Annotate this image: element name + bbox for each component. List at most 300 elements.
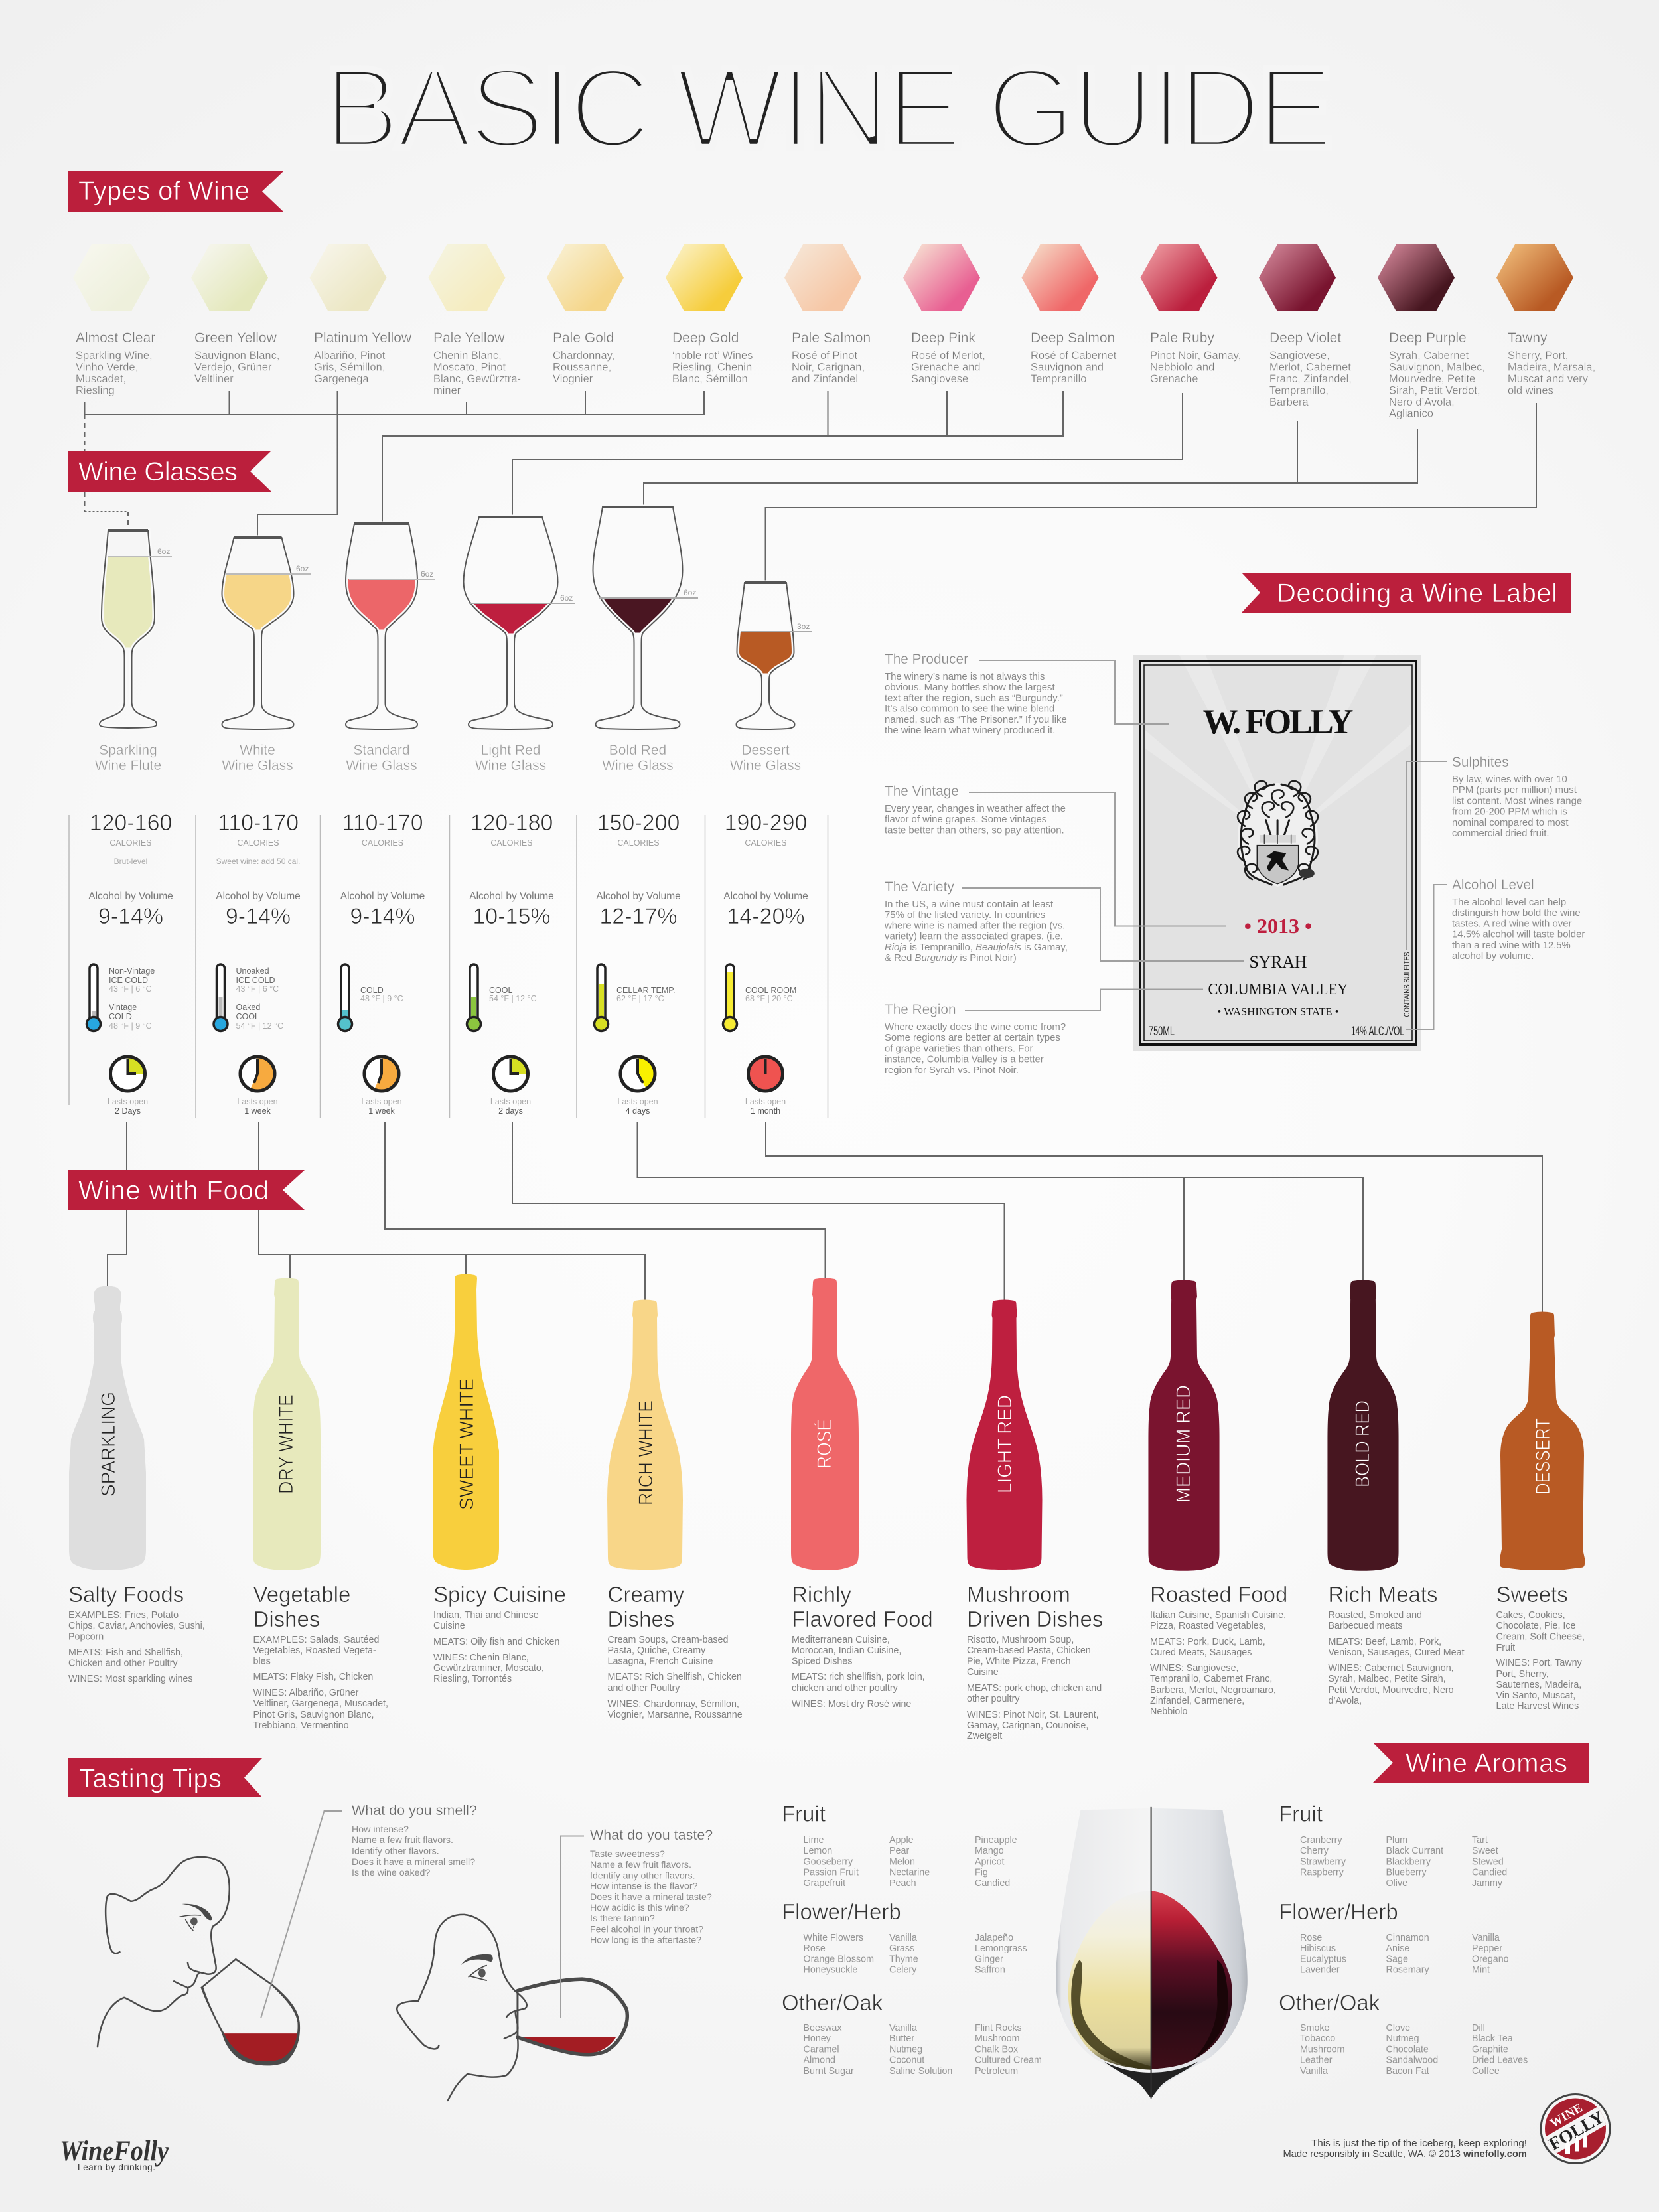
text: tawny: Tawny	[1508, 331, 1548, 346]
text: pale yellow: miner	[433, 385, 461, 397]
glass base	[1104, 2062, 1198, 2099]
text: almost clear: Riesling	[76, 385, 115, 397]
aromas: other and oak: Mushroom	[1300, 2044, 1345, 2055]
food: rich meats: Petit Verdot, Mourvedre, Nero	[1329, 1685, 1454, 1696]
logo: Wine Folly wordmark: Learn by drinking.	[78, 2162, 155, 2172]
hexagon: pale gold	[547, 244, 624, 311]
aromas: fruit: Fruit	[1279, 1801, 1323, 1826]
stats: sparkling	[86, 810, 173, 1116]
bottle: rosé: ROSÉ	[814, 1419, 835, 1469]
text: deep gold: Riesling, Chenin	[672, 361, 752, 373]
text: deep violet: Franc, Zinfandel,	[1269, 373, 1352, 385]
text: deep salmon: Deep Salmon	[1031, 331, 1115, 346]
aromas: other and oak: Leather	[1300, 2055, 1333, 2066]
food: richly flavored food: Richly	[792, 1582, 851, 1607]
text: what do you smell: Name a few fruit flavors.	[352, 1835, 453, 1846]
hexagon: tawny	[1496, 244, 1573, 311]
glass: white wine	[222, 538, 311, 773]
text: what do you taste: How intense is the flavor?	[590, 1881, 698, 1892]
label text: producer: W. FOLLY	[1202, 703, 1354, 741]
stats: light red: Lasts open	[490, 1097, 531, 1106]
callout: sulphites: commercial dried fruit.	[1452, 828, 1549, 839]
text: almost clear: Muscadet,	[76, 373, 126, 385]
aromas: fruit: Cranberry	[1300, 1835, 1342, 1846]
stats: sparkling: 43 °F | 6 °C	[109, 984, 152, 994]
stats: light red: Alcohol by Volume	[469, 891, 554, 902]
stats: dessert: 14-20%	[727, 904, 805, 929]
text: pale ruby: Pale Ruby	[1150, 331, 1214, 346]
text: what do you smell: Is the wine oaked?	[352, 1868, 430, 1878]
stats: white: CALORIES	[237, 838, 279, 848]
food: creamy dishes: Lasagna, French Cuisine	[608, 1657, 713, 1667]
callout: the producer: The winery’s name is not always this	[885, 672, 1045, 682]
connector lines: glasses to bottles	[108, 1122, 1542, 1313]
callout: alcohol level: tastes. A red wine with over	[1452, 919, 1571, 929]
aromas: fruit: Lemon	[803, 1846, 832, 1856]
glass: white wine: 6oz	[296, 564, 309, 573]
callout: sulphites	[1452, 755, 1582, 839]
food: creamy dishes: and other Poultry	[608, 1683, 680, 1694]
stats: bold red: Alcohol by Volume	[596, 891, 681, 902]
aromas: other and oak: Dill	[1472, 2023, 1485, 2033]
aromas: other and oak: Saline Solution	[889, 2066, 952, 2077]
white wine dark edge	[1071, 1960, 1151, 2070]
face lower profile	[98, 1972, 200, 2047]
logo: Wine Folly badge	[1540, 2093, 1611, 2164]
bottle: rich white	[607, 1299, 683, 1570]
aromas: other and oak: Burnt Sugar	[803, 2066, 854, 2077]
aromas: flower and herb: Sage	[1386, 1954, 1408, 1964]
text: what do you smell: What do you smell?	[352, 1803, 477, 1818]
stats: white	[214, 810, 301, 1116]
food: sweets: Fruit	[1496, 1643, 1515, 1653]
callout: sulphites: By law, wines with over 10	[1452, 774, 1567, 785]
callout: sulphites: list content. Most wines range	[1452, 796, 1582, 806]
section banner: Types of Wine	[68, 171, 283, 212]
hexagon: deep salmon	[1022, 244, 1099, 311]
label text: region: COLUMBIA VALLEY	[1208, 981, 1348, 998]
food: roasted food: Zinfandel, Carmenere,	[1150, 1696, 1244, 1706]
text: deep salmon: Tempranillo	[1031, 373, 1086, 385]
aromas: fruit	[782, 1801, 1017, 1889]
text: platinum yellow: Gargenega	[314, 373, 369, 385]
food: rich meats	[1329, 1582, 1465, 1706]
bottle: rosé	[791, 1278, 859, 1570]
callout: alcohol level: The alcohol level can help	[1452, 897, 1566, 908]
stats: sparkling: 9-14%	[98, 904, 163, 929]
callout: the variety: where wine is named after the region (vs.	[884, 921, 1065, 931]
illustration: half white half red wine glass	[1056, 1807, 1248, 2099]
text: platinum yellow	[314, 331, 412, 385]
stats: standard: Lasts open	[361, 1097, 402, 1106]
logo: Wine Folly wordmark: WineFolly	[60, 2136, 169, 2167]
food: sweets: Port, Sherry,	[1496, 1669, 1549, 1680]
hexagon: platinum yellow	[309, 244, 386, 311]
food: mushroom driven dishes: Cream-based Pasta, Chicken	[967, 1645, 1091, 1656]
stats: light red: COOL	[489, 986, 512, 995]
hexagon: deep violet	[1259, 244, 1336, 311]
callout: the producer: obvious. Many bottles show the largest	[885, 682, 1055, 693]
food: sweets: Late Harvest Wines	[1496, 1701, 1579, 1712]
food: rich meats: Barbecued meats	[1329, 1621, 1403, 1631]
callout: the variety: The Variety	[885, 879, 954, 895]
eyebrow	[461, 1954, 493, 1965]
stats: bold red: CALORIES	[617, 838, 660, 848]
stats: standard: 110-170	[342, 810, 423, 836]
bottle: dessert	[1500, 1311, 1585, 1570]
food: mushroom driven dishes	[967, 1582, 1103, 1741]
aromas: fruit: Tart	[1472, 1835, 1488, 1846]
stats: sparkling: Lasts open	[108, 1097, 148, 1106]
glass: bold red: Wine Glass	[602, 758, 674, 773]
food: mushroom driven dishes: other poultry	[967, 1694, 1020, 1704]
stats: bold red: CELLAR TEMP.	[616, 986, 675, 995]
stats: standard: COLD	[360, 986, 384, 995]
aromas: flower and herb: Anise	[1386, 1943, 1409, 1954]
aromas: other and oak: Vanilla	[889, 2023, 917, 2033]
callout: the variety: & Red Burgundy is Pinot Noir)	[885, 953, 1017, 964]
aromas: fruit: Lime	[803, 1835, 824, 1846]
callout: alcohol level: distinguish how bold the wine	[1452, 908, 1581, 919]
text: pale yellow: Pale Yellow	[433, 331, 505, 346]
callout: the producer: It’s also common to see the wine blend	[885, 704, 1054, 715]
food: rich meats: Roasted, Smoked and	[1329, 1610, 1422, 1621]
stats: dessert: COOL ROOM	[745, 986, 796, 995]
text: tawny: old wines	[1508, 385, 1553, 397]
aromas: flower and herb: Eucalyptus	[1300, 1954, 1346, 1964]
label text: sulfites: CONTAINS SULFITES	[1404, 952, 1411, 1017]
text: almost clear: Sparkling Wine,	[76, 350, 153, 362]
glass: sparkling flute	[95, 530, 172, 773]
text: what do you taste: Feel alcohol in your throat?	[590, 1924, 703, 1935]
text: what do you smell	[261, 1803, 477, 2018]
stats: white: ICE COLD	[236, 976, 275, 985]
aromas: fruit: Peach	[889, 1878, 916, 1889]
callout: alcohol level: than a red wine with 12.5%	[1452, 940, 1571, 951]
glass outline	[200, 1958, 300, 2065]
glass: light red	[463, 517, 575, 773]
panel: wine colour hexagons	[73, 244, 1573, 311]
label text: volume: 750ML	[1149, 1025, 1175, 1039]
food: salty foods: WINES: Most sparkling wines	[68, 1674, 193, 1684]
red wine dark edge	[1192, 1960, 1228, 2061]
text: deep gold: Deep Gold	[672, 331, 739, 346]
glass: bold red: Bold Red	[609, 743, 666, 758]
food: salty foods: Salty Foods	[68, 1582, 184, 1607]
panel: wine statistics columns	[69, 810, 828, 1118]
illustration: tasting wine	[397, 1915, 627, 2101]
glass: sparkling flute: 6oz	[157, 547, 170, 556]
icon: heraldic crest	[1238, 781, 1318, 887]
head profile	[397, 1915, 527, 2049]
food: spicy cuisine: Cuisine	[433, 1621, 465, 1631]
aromas: flower and herb: Thyme	[889, 1954, 918, 1964]
text: almost clear	[76, 331, 155, 397]
stats: sparkling: ICE COLD	[109, 976, 148, 985]
wine in glass	[222, 2033, 298, 2063]
aromas: flower and herb: Jalapeño	[975, 1933, 1013, 1943]
aromas: other and oak: Chalk Box	[975, 2044, 1018, 2055]
food: spicy cuisine: MEATS: Oily fish and Chicken	[433, 1637, 559, 1647]
aromas: flower and herb: Mint	[1472, 1965, 1490, 1976]
panel: wine colour descriptions	[76, 331, 1595, 419]
food: richly flavored food: chicken and other poultry	[792, 1683, 899, 1694]
callout: the variety	[884, 879, 1068, 964]
aromas: flower and herb: Celery	[889, 1965, 917, 1976]
stats: sparkling: COLD	[109, 1012, 132, 1021]
food: spicy cuisine: Riesling, Torrontés	[433, 1674, 512, 1684]
hexagon: deep gold	[666, 244, 743, 311]
glass: standard	[346, 524, 435, 773]
stats: sparkling: Non-Vintage	[109, 966, 155, 976]
text: green yellow: Verdejo, Grüner	[194, 361, 272, 373]
aromas: other and oak: Coffee	[1472, 2066, 1500, 2077]
aromas: fruit: Strawberry	[1300, 1856, 1346, 1867]
text: deep pink: Grenache and	[911, 361, 981, 373]
text: tawny: Muscat and very	[1508, 373, 1589, 385]
hexagon: pale salmon	[784, 244, 861, 311]
stats: bold red	[595, 810, 681, 1116]
aromas: flower and herb: Rose	[1300, 1933, 1322, 1943]
text: what do you smell: Identify other flavors.	[352, 1846, 439, 1857]
section banner: Types of Wine: Types of Wine	[78, 177, 250, 206]
stats: standard: 1 week	[368, 1106, 396, 1116]
stats: white: COOL	[236, 1012, 259, 1021]
glass: bold red	[593, 507, 698, 773]
glass: standard: Wine Glass	[346, 758, 417, 773]
aromas: other and oak: Mushroom	[975, 2033, 1020, 2044]
footer note: This is just the tip of the iceberg, keep exploring!	[1311, 2138, 1527, 2149]
food: richly flavored food: Flavored Food	[792, 1607, 933, 1631]
aromas: flower and herb: Flower/Herb	[1279, 1899, 1398, 1924]
callout: the region: The Region	[885, 1002, 956, 1017]
food: roasted food: Nebbiolo	[1150, 1706, 1187, 1717]
food: sweets: WINES: Port, Tawny	[1496, 1658, 1583, 1668]
callout: the vintage: taste better than others, so pay attention.	[885, 825, 1064, 836]
food: roasted food: Pizza, Roasted Vegetables,	[1150, 1621, 1266, 1631]
text: pale ruby: Pinot Noir, Gamay,	[1150, 350, 1241, 362]
food: sweets	[1496, 1582, 1585, 1712]
food: richly flavored food: Spiced Dishes	[792, 1657, 852, 1667]
text: almost clear: Vinho Verde,	[76, 361, 138, 373]
text: deep violet: Merlot, Cabernet	[1269, 361, 1351, 373]
food: mushroom driven dishes: WINES: Pinot Noir, St. Laurent,	[967, 1710, 1099, 1720]
bottle: rich white: RICH WHITE	[635, 1400, 657, 1505]
text: pale yellow: Moscato, Pinot	[433, 361, 506, 373]
aromas: other and oak: Graphite	[1472, 2044, 1508, 2055]
aromas: fruit: Mango	[975, 1846, 1004, 1856]
wine in glass	[518, 2037, 616, 2053]
glass: light red: Wine Glass	[475, 758, 546, 773]
bottle: medium red	[1148, 1280, 1220, 1571]
text: deep pink	[911, 331, 985, 385]
stats: bold red: 150-200	[597, 810, 680, 836]
stats: white: 9-14%	[226, 904, 291, 929]
food: richly flavored food: Moroccan, Indian Cuisine,	[792, 1645, 901, 1656]
stats: sparkling: 48 °F | 9 °C	[109, 1021, 152, 1031]
food: creamy dishes: Creamy	[608, 1582, 685, 1607]
section banner: Tasting Tips: Tasting Tips	[79, 1764, 222, 1793]
head profile	[106, 1857, 230, 1974]
callout: alcohol level	[1452, 877, 1585, 962]
text: pale ruby: Nebbiolo and	[1150, 361, 1214, 373]
food: mushroom driven dishes: MEATS: pork chop, chicken and	[967, 1683, 1102, 1694]
stats: dessert: CALORIES	[745, 838, 787, 848]
text: deep violet: Tempranillo,	[1269, 385, 1329, 397]
callout: the region: Where exactly does the wine come from?	[885, 1022, 1066, 1033]
food: roasted food: Italian Cuisine, Spanish Cuisine,	[1150, 1610, 1286, 1621]
label text: alcohol: 14% ALC./VOL	[1351, 1025, 1404, 1039]
panel: red wine aromas	[1279, 1801, 1528, 2077]
glass: standard: Standard	[353, 743, 410, 758]
connector lines: label callouts	[962, 660, 1447, 1029]
centre line	[1151, 1807, 1152, 2099]
aromas: fruit: Sweet	[1472, 1846, 1498, 1856]
glass outline	[516, 1991, 518, 2037]
callout: the producer: The Producer	[885, 652, 968, 667]
food: sweets: Cream, Soft Cheese,	[1496, 1631, 1585, 1642]
footer note: Made responsibly in Seattle, WA. © 2013 winefolly.com	[1283, 2149, 1527, 2160]
aromas: fruit: Pear	[889, 1846, 909, 1856]
food: rich meats: d’Avola,	[1329, 1696, 1362, 1706]
food: sweets: Vin Santo, Muscat,	[1496, 1690, 1575, 1701]
text: deep pink: Rosé of Merlot,	[911, 350, 985, 362]
text: pale ruby	[1150, 331, 1241, 385]
logo: Wine Folly badge: WINE	[1548, 2101, 1585, 2130]
aromas: fruit: Plum	[1386, 1835, 1407, 1846]
food: salty foods: Chips, Caviar, Anchovies, Sushi,	[68, 1621, 205, 1631]
food: roasted food: Cured Meats, Sausages	[1150, 1647, 1252, 1658]
aromas: other and oak: Almond	[803, 2055, 835, 2066]
text: what do you taste: Identify any other flavors.	[590, 1870, 695, 1881]
aromas: flower and herb: Vanilla	[889, 1933, 917, 1943]
hexagon: deep purple	[1378, 244, 1455, 311]
section banner: Decoding a Wine Label: Decoding a Wine Label	[1277, 579, 1557, 608]
logo: Wine Folly badge: FOLLY	[1546, 2106, 1607, 2154]
food: mushroom driven dishes: Zweigelt	[967, 1731, 1002, 1741]
aromas: flower and herb: Ginger	[975, 1954, 1003, 1964]
aromas: fruit: Apple	[889, 1835, 914, 1846]
aromas: flower and herb: Honeysuckle	[803, 1965, 857, 1976]
callout: the region: instance, Columbia Valley is a better	[885, 1055, 1044, 1065]
aromas: other and oak: Beeswax	[803, 2023, 842, 2033]
stats: dessert	[723, 810, 808, 1116]
stats: sparkling: 120-160	[90, 810, 172, 836]
glass: sparkling flute: Wine Flute	[95, 758, 161, 773]
text: what do you taste: Is there tannin?	[590, 1913, 655, 1924]
aromas: other and oak: Clove	[1386, 2023, 1410, 2033]
label text: variety: SYRAH	[1249, 952, 1307, 972]
aromas: flower and herb	[1279, 1899, 1509, 1976]
food: creamy dishes: Dishes	[608, 1607, 674, 1631]
bottle: sweet white	[433, 1274, 499, 1570]
food: creamy dishes: Cream Soups, Cream-based	[608, 1635, 729, 1645]
food: salty foods	[68, 1582, 205, 1684]
stats: sparkling: 2 Days	[115, 1106, 141, 1116]
aromas: other and oak: Vanilla	[1300, 2066, 1328, 2077]
stats: white: Alcohol by Volume	[216, 891, 301, 902]
callout: the producer	[885, 652, 1067, 736]
text: what do you taste: How acidic is this wine?	[590, 1903, 689, 1913]
section banner: Decoding a Wine Label	[1242, 573, 1571, 613]
hexagon: pale yellow	[429, 244, 506, 311]
aromas: other and oak: Sandalwood	[1386, 2055, 1438, 2066]
aromas: fruit: Olive	[1386, 1878, 1407, 1889]
aromas: fruit: Blueberry	[1386, 1868, 1427, 1878]
eyebrow	[182, 1904, 212, 1920]
text: deep purple: Sirah, Petit Verdot,	[1389, 385, 1480, 397]
text: tawny	[1508, 331, 1595, 397]
food: vegetable dishes: MEATS: Flaky Fish, Chicken	[253, 1672, 373, 1682]
food: vegetable dishes	[253, 1582, 388, 1731]
glass: dessert: Wine Glass	[730, 758, 801, 773]
text: green yellow	[194, 331, 279, 385]
text: deep purple: Deep Purple	[1389, 331, 1467, 346]
bottle: dry white: DRY WHITE	[275, 1394, 297, 1494]
text: green yellow: Veltliner	[194, 373, 234, 385]
food: rich meats: Rich Meats	[1329, 1582, 1438, 1607]
food: sweets: Sauternes, Madeira,	[1496, 1680, 1581, 1690]
callout: alcohol level: alcohol by volume.	[1452, 951, 1534, 962]
food: mushroom driven dishes: Mushroom	[967, 1582, 1070, 1607]
aromas: flower and herb: Rosemary	[1386, 1965, 1429, 1976]
text: pale salmon	[792, 331, 871, 385]
food: richly flavored food	[792, 1582, 933, 1710]
eye	[469, 1966, 486, 1980]
stats: dessert: 68 °F | 20 °C	[745, 994, 793, 1003]
food: mushroom driven dishes: Cuisine	[967, 1667, 999, 1678]
panel: wine glasses	[95, 507, 812, 773]
stats: light red: 2 days	[498, 1106, 523, 1116]
text: what do you taste: What do you taste?	[590, 1827, 713, 1843]
stats: sparkling: CALORIES	[109, 838, 152, 848]
text: tawny: Sherry, Port,	[1508, 350, 1568, 362]
aromas: other and oak: Dried Leaves	[1472, 2055, 1528, 2066]
hexagon: pale ruby	[1140, 244, 1217, 311]
aromas: fruit: Fig	[975, 1868, 988, 1878]
glass: white wine: Wine Glass	[222, 758, 293, 773]
title: BASIC WINE GUIDE	[324, 44, 1333, 172]
text: pale yellow: Blanc, Gewürztra-	[433, 373, 521, 385]
bottle: dessert: DESSERT	[1532, 1418, 1554, 1495]
food: roasted food	[1150, 1582, 1287, 1717]
text: deep violet	[1269, 331, 1352, 408]
text: pale salmon: Noir, Carignan,	[792, 361, 865, 373]
section banner: Wine Aromas: Wine Aromas	[1406, 1749, 1567, 1778]
food: mushroom driven dishes: Gamay, Carignan, Counoise,	[967, 1720, 1088, 1731]
aromas: other and oak: Honey	[803, 2033, 831, 2044]
stats: white: 43 °F | 6 °C	[236, 984, 279, 994]
food: creamy dishes: WINES: Chardonnay, Sémillon,	[608, 1699, 739, 1710]
text: pale gold: Viognier	[553, 373, 593, 385]
text: deep violet: Barbera	[1269, 396, 1309, 408]
aromas: fruit: Candied	[975, 1878, 1010, 1889]
text: what do you smell: Does it have a mineral smell?	[352, 1857, 475, 1868]
aromas: other and oak: Tobacco	[1300, 2033, 1335, 2044]
food: creamy dishes: Viognier, Marsanne, Roussanne	[608, 1710, 743, 1720]
food: mushroom driven dishes: Pie, White Pizza, French	[967, 1657, 1071, 1667]
food: roasted food: Tempranillo, Cabernet Franc,	[1150, 1674, 1272, 1684]
aromas: other and oak: Petroleum	[975, 2066, 1018, 2077]
section banner: Wine with Food: Wine with Food	[78, 1176, 269, 1205]
text: deep gold	[672, 331, 753, 385]
text: deep gold: Blanc, Sémillon	[672, 373, 748, 385]
food: vegetable dishes: EXAMPLES: Salads, Sautéed	[253, 1635, 379, 1645]
text: deep violet: Deep Violet	[1269, 331, 1341, 346]
callout: sulphites: nominal compared to most	[1452, 818, 1569, 828]
food: salty foods: Chicken and other Poultry	[68, 1658, 178, 1668]
food: vegetable dishes: Veltliner, Gargenega, Muscadet,	[253, 1698, 388, 1709]
